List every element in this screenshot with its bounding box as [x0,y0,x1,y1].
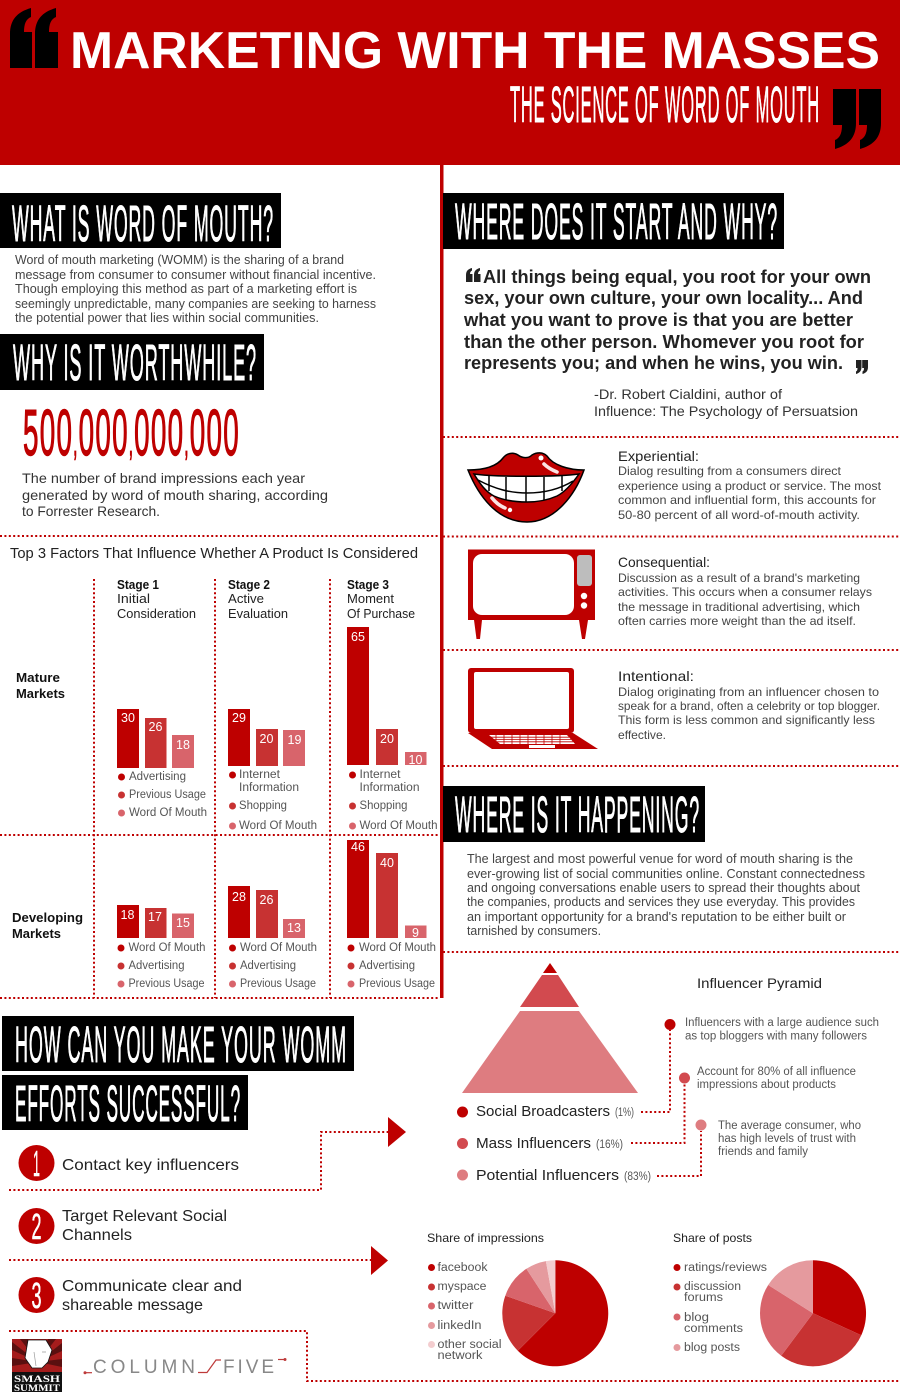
title: MARKETING WITH THE MASSES [70,22,880,80]
step 2: Channels [62,1227,132,1244]
step 2 [18,1206,227,1247]
chart: influencer pyramid [462,963,638,1093]
pyramid legend: Social Broadcasters [476,1104,610,1120]
text: potential influencers note: friends and family [718,1146,808,1158]
stage 3 heading: Of Purchase [347,607,415,621]
icon: television [468,550,595,639]
pyramid connectors [631,1019,706,1176]
text: word of mouth definition: Word of mouth marketing (WOMM) is the sharing of a brand [15,253,344,267]
step 3: Communicate clear and [62,1278,242,1295]
row label: mature markets: Markets [16,687,65,701]
legend: share of posts: blog posts [684,1342,740,1354]
text: intentional: Dialog originating from an influencer chosen to [618,685,879,699]
bar chart: developing stage 1 [117,905,206,990]
heading: why is it worthwhile [0,334,264,391]
text: consequential: activities. This occurs when a consumer relays [618,585,872,599]
bar chart: mature stage 1: Advertising [129,771,186,783]
step 1: Contact key influencers [62,1157,239,1174]
bar chart: mature stage 3: Internet [360,769,401,781]
stage 2 heading: Evaluation [228,607,288,621]
bar chart: developing stage 1: 15 [176,916,190,930]
text: consequential: often carries more weight than the ad itself. [618,614,856,628]
bar chart: developing stage 1: 18 [121,908,134,922]
text: where it is happening: the companies, products and services they use everyday. This provides [467,895,855,909]
logo: column five: COLUMN [93,1357,195,1378]
logo: smash summit: SUMMIT [14,1384,61,1394]
legend: share of posts: blog [684,1312,709,1324]
bar chart: developing stage 2: Word Of Mouth [240,942,317,954]
pull quote: represents you; and when he wins, you win. [464,353,843,373]
bar chart: mature stage 1: Word Of Mouth [129,807,207,819]
text: experiential [618,448,882,522]
pyramid legend: (83%) [624,1171,651,1183]
icon: opening quote mark [10,8,58,68]
legend: share of impressions: facebook [438,1262,488,1274]
pyramid legend: (16%) [596,1139,623,1151]
pie chart: share of posts [760,1260,866,1366]
pyramid legend [457,1104,651,1184]
bar chart: developing stage 3: Word Of Mouth [359,942,436,954]
stage 1 heading: Stage 1 [117,578,159,592]
bar chart: mature stage 1: 26 [149,720,162,734]
text: intentional: effective. [618,728,666,742]
step 1 [18,1143,239,1184]
bar chart: mature stage 3: 20 [380,732,394,746]
text: word of mouth definition: seemingly unpredictable, many companies are seeking to harness [15,297,376,311]
pull quote: what you want to prove is that you are better [463,310,853,330]
step 2: 2 [32,1206,42,1247]
bar chart: developing stage 2: 28 [232,890,246,904]
bar chart: mature stage 3: 10 [409,753,422,767]
text: mass influencers note: Account for 80% of all influence [697,1066,856,1078]
bar chart: developing stage 2: Advertising [240,960,296,972]
text: where it is happening: an important opportunity for a brand's reputation to be either built or [467,910,846,924]
legend: share of posts [674,1262,767,1354]
icon: laptop [468,668,598,749]
stage 1 heading: Initial [117,592,150,606]
bar chart: mature stage 1: Previous Usage [129,789,206,801]
row label: developing markets: Markets [12,927,61,941]
heading: where is it happening [443,786,705,843]
logo: column five: FIVE [223,1357,274,1378]
attribution [594,386,858,419]
icon: small opening quote [466,268,480,282]
stage 2 heading: Active [228,592,264,606]
text: social broadcasters note: Influencers with a large audience such [685,1017,879,1029]
text: experiential: experience using a product or service. The most [618,479,882,493]
stage 1 heading [117,578,196,621]
bar chart: mature stage 2: 20 [260,732,273,746]
bar chart: mature stage 2 [228,709,317,832]
heading: how can you make your womm efforts successful: EFFORTS SUCCESSFUL? [15,1075,241,1132]
arrow: step 2 connector [9,1246,388,1275]
text: word of mouth definition: Though employing this method as part of a marketing effort is [15,282,357,296]
bar chart: mature stage 2: Word Of Mouth [239,820,317,832]
logo: column five [84,1357,286,1378]
bar chart: developing stage 1: Word Of Mouth [128,942,206,954]
legend: share of impressions: linkedIn [438,1320,482,1332]
step 1: 1 [33,1143,40,1184]
text: experiential: 50-80 percent of all word-of-mouth activity. [618,508,860,522]
row label: mature markets [16,671,65,701]
bar chart: developing stage 1: Advertising [128,960,184,972]
text: brand impressions: to Forrester Research. [22,503,160,519]
chart title: Top 3 Factors That Influence Whether A Product Is Considered [10,546,418,562]
step 3 [18,1275,242,1316]
bar chart: developing stage 3: 9 [412,926,419,940]
text: consequential: Discussion as a result of a brand's marketing [618,571,860,585]
bar chart: mature stage 3: Shopping [360,800,408,812]
heading: share of impressions: Share of impressions [427,1231,544,1245]
pull quote: sex, your own culture, your own locality... And [464,288,863,308]
bar chart: developing stage 3 [347,840,436,990]
text: intentional [618,668,880,742]
text: word of mouth definition [15,253,376,325]
text: mass influencers note: impressions about products [697,1079,836,1091]
legend: share of posts: comments [684,1323,743,1335]
bar chart: mature stage 3 [347,627,438,832]
bar chart: developing stage 2 [228,886,317,990]
stage 1 heading: Consideration [117,607,196,621]
text: brand impressions: generated by word of mouth sharing, according [22,487,328,503]
stage 2 heading: Stage 2 [228,578,270,592]
attribution: Influence: The Psychology of Persuatsion [594,403,858,419]
text: word of mouth definition: message from consumer to consumer without financial incentive. [15,268,376,282]
bar chart: mature stage 3: 65 [351,630,365,644]
stage 3 heading: Stage 3 [347,578,389,592]
bar chart: developing stage 1: Previous Usage [128,978,204,990]
bar chart: mature stage 1: 30 [121,711,135,725]
text: experiential: Experiential: [618,448,699,464]
stage 2 heading [228,578,288,621]
text: WHY IS IT WORTHWHILE? [13,334,257,391]
text: where it is happening: tarnished by consumers. [467,924,601,938]
row label: developing markets [12,911,83,941]
text: consequential [618,554,872,628]
legend: share of impressions: twitter [438,1300,474,1312]
text: potential influencers note [718,1120,861,1158]
row label: developing markets: Developing [12,911,83,925]
legend: share of impressions: other social [438,1339,502,1351]
legend: share of impressions: myspace [438,1281,486,1293]
text: intentional: This form is less common and significantly less [618,713,875,727]
heading: what is word of mouth [0,193,281,252]
heading: how can you make your womm efforts successful [2,1016,354,1132]
icon: closing quote mark [833,89,881,149]
text: where it is happening: and ongoing conversations enable users to spread their thoughts about [467,881,861,895]
bar chart: developing stage 3: 46 [351,840,365,854]
pyramid legend: Potential Influencers [476,1168,619,1184]
bar chart: developing stage 2: Previous Usage [240,978,316,990]
bar chart: developing stage 1: 17 [148,910,162,924]
bar chart: mature stage 2: Internet [239,769,281,781]
text: where it is happening: ever-growing list of social communities online. Constant connectedness [467,867,865,881]
step 3: shareable message [62,1297,203,1314]
legend: share of impressions: network [438,1350,483,1362]
text: mass influencers note [697,1066,856,1091]
step 2: Target Relevant Social [62,1208,227,1225]
icon: small closing quote [856,360,868,374]
bar chart: developing stage 3: 40 [380,856,394,870]
text: potential influencers note: The average consumer, who [718,1120,861,1132]
stage 3 heading [347,578,415,621]
text: potential influencers note: has high levels of trust with [718,1133,856,1145]
logo: smash summit [12,1339,62,1394]
text: where it is happening [467,852,865,938]
text: WHAT IS WORD OF MOUTH? [12,195,274,252]
bar chart: mature stage 2: Information [239,782,299,794]
bar chart: developing stage 2: 13 [287,921,301,935]
text: experiential: Dialog resulting from a consumers direct [618,464,842,478]
text: intentional: speak for a brand, often a celebrity or top blogger. [618,699,880,713]
text: intentional: Intentional: [618,668,694,684]
legend: share of posts: ratings/reviews [684,1262,767,1274]
bar chart: developing stage 3: Previous Usage [359,978,435,990]
stage 3 heading: Moment [347,592,395,606]
logo: smash summit: SMASH [14,1375,61,1385]
bar chart: mature stage 2: Shopping [239,800,287,812]
arrow: step 1 connector [9,1117,406,1190]
heading: share of posts: Share of posts [673,1231,752,1245]
big number: 500,000,000,000 [23,396,240,469]
pie chart: share of impressions [502,1260,608,1366]
icon: smiling mouth [468,453,584,522]
text: experiential: common and influential form, this accounts for [618,493,876,507]
bar chart: mature stage 3: Word Of Mouth [360,820,438,832]
text: social broadcasters note [685,1017,879,1042]
bar chart: mature stage 2: 19 [288,733,301,747]
bar chart: developing stage 2: 26 [260,893,273,907]
pull quote: than the other person. Whomever you root for [464,332,864,352]
row label: mature markets: Mature [16,671,60,685]
bar chart: mature stage 1: 18 [176,738,190,752]
legend: share of posts: forums [684,1292,723,1304]
text: word of mouth definition: the potential power that lies within social communities. [15,311,319,325]
step 3: 3 [32,1275,42,1316]
bar chart: mature stage 1 [117,709,207,819]
bar chart: mature stage 2: 29 [232,711,246,725]
bar chart: mature stage 3: Information [360,782,420,794]
pyramid title: Influencer Pyramid [697,975,822,991]
text: consequential: Consequential: [618,554,710,570]
attribution: -Dr. Robert Cialdini, author of [594,386,782,402]
legend: share of posts: discussion [684,1281,741,1293]
pyramid legend: Mass Influencers [476,1136,591,1152]
text: brand impressions: The number of brand impressions each year [22,470,305,486]
pull quote: All things being equal, you root for your own [483,267,871,287]
pyramid legend: (1%) [615,1107,634,1119]
legend: share of impressions [428,1262,502,1362]
pull quote [463,267,871,374]
text: brand impressions [22,470,328,519]
bar chart: developing stage 3: Advertising [359,960,415,972]
header banner [0,0,900,165]
text: where it is happening: The largest and most powerful venue for word of mouth sharing is the [467,852,853,866]
text: social broadcasters note: as top bloggers with many followers [685,1030,867,1042]
text: consequential: the message in traditional advertising, which [618,600,860,614]
